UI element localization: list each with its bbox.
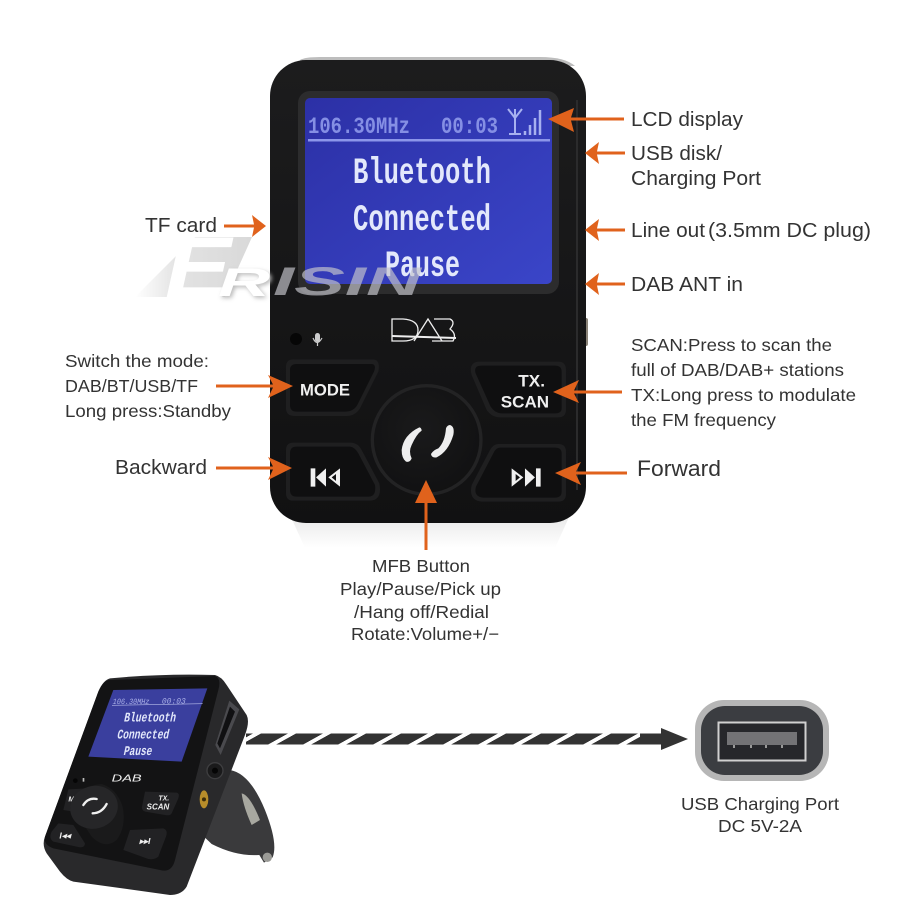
USB port illustration [695,700,829,781]
USB port side [215,701,239,755]
text block: scan and TX: full of DAB/DAB+ stations [631,360,844,380]
label: line out: Line out [631,220,705,242]
text block: mode switch: DAB/BT/USB/TF [65,376,198,396]
LCD panel [305,98,552,288]
label: USB disk charging port [631,143,761,190]
arrow: LCD display [548,108,624,132]
labels [65,109,871,644]
label: LCD display: LCD display [631,109,743,131]
LCD panel: 00:03 [441,114,498,140]
watermark: Erisin: R [218,261,270,305]
arrow: forward button [555,462,627,485]
small buttons: TX. [158,796,169,803]
label: Backward: Backward [115,457,207,479]
small buttons: I◂◂ [59,830,72,840]
text block: scan and TX: SCAN:Press to scan the [631,335,832,355]
label: USB charging port [681,794,839,836]
LCD panel: 106.30MHz [308,114,410,140]
device right side highlight [576,100,578,490]
forward button [471,444,566,502]
antenna gold connector [200,790,208,808]
arrow: line out [585,219,625,241]
watermark: Erisin: E [165,220,234,316]
jack port [207,763,223,779]
device side jack [583,318,588,346]
buttons [286,359,566,502]
arrow: TF card [224,215,266,237]
arrow: MFB button [415,480,437,550]
TX SCAN button: TX. [518,372,545,391]
small LCD: Bluetooth [122,712,177,727]
main device photo [270,57,588,548]
arrow: backward button [216,457,292,480]
TX SCAN button [471,362,566,417]
LCD panel: Connected [353,200,491,242]
rotary knob [371,384,483,496]
text block: mode switch: Long press:Standby [65,401,231,421]
text block: scan and TX [631,335,856,430]
text block: MFB button: /Hang off/Redial [354,602,489,622]
perspective device photo [44,675,274,895]
backward button [286,443,380,501]
DAB logo [392,319,456,341]
text block: MFB button: Rotate:Volume+/− [351,624,499,644]
callout arrows [216,108,627,550]
text block: MFB button: Play/Pause/Pick up [340,579,501,599]
device body [270,60,586,523]
device front face [45,676,219,871]
arrow: mode button [216,375,293,398]
microphone hole and icon [290,333,322,346]
label: DAB ANT in: DAB ANT in [631,274,743,296]
text block: MFB button: MFB Button [372,556,470,576]
small buttons: M/ [68,795,77,804]
LCD panel: Pause [385,246,460,288]
text block: scan and TX: the FM frequency [631,410,776,430]
car plug [187,770,274,863]
small LCD: 106.30MHz [112,698,150,707]
device reflection [290,515,570,548]
label: USB charging port: DC 5V-2A [718,816,802,836]
small buttons: ▸▸I [138,836,151,846]
small LCD: Pause [122,745,154,760]
TX SCAN button: SCAN [501,392,549,411]
text block: mode switch: Switch the mode: [65,351,209,371]
MODE button [286,359,379,416]
LCD bezel [298,91,559,294]
text block: MFB button [340,556,501,644]
text block: mode switch [65,351,231,421]
label: line out [631,220,871,242]
small LCD: Connected [116,728,170,743]
MODE button: MODE [300,380,350,399]
mic and DAB: DAB [112,774,142,785]
arrow: USB disk [585,142,625,164]
mic and DAB [73,774,142,785]
dashed connector arrow [246,728,688,750]
device top silver edge [300,57,575,66]
small buttons [50,788,179,859]
arrow: DAB ANT in [585,273,625,295]
text block: scan and TX: TX:Long press to modulate [631,385,856,405]
small LCD [88,688,207,762]
label: USB disk charging port: Charging Port [631,168,761,190]
label: Forward: Forward [637,456,721,481]
label: USB disk charging port: USB disk/ [631,143,722,165]
small LCD: 00:03 [161,698,187,707]
label: TF card: TF card [145,215,217,237]
arrow: TX SCAN button [553,380,622,403]
device body side [44,675,248,895]
icon: phone handsets [402,425,454,462]
label: line out: (3.5mm DC plug) [708,220,871,242]
LCD panel: Bluetooth [353,153,491,195]
label: USB charging port: USB Charging Port [681,794,839,814]
small knob [65,781,124,844]
watermark: Erisin [135,220,423,316]
small buttons: SCAN [147,802,170,812]
watermark: Erisin: ISIN [273,260,423,304]
